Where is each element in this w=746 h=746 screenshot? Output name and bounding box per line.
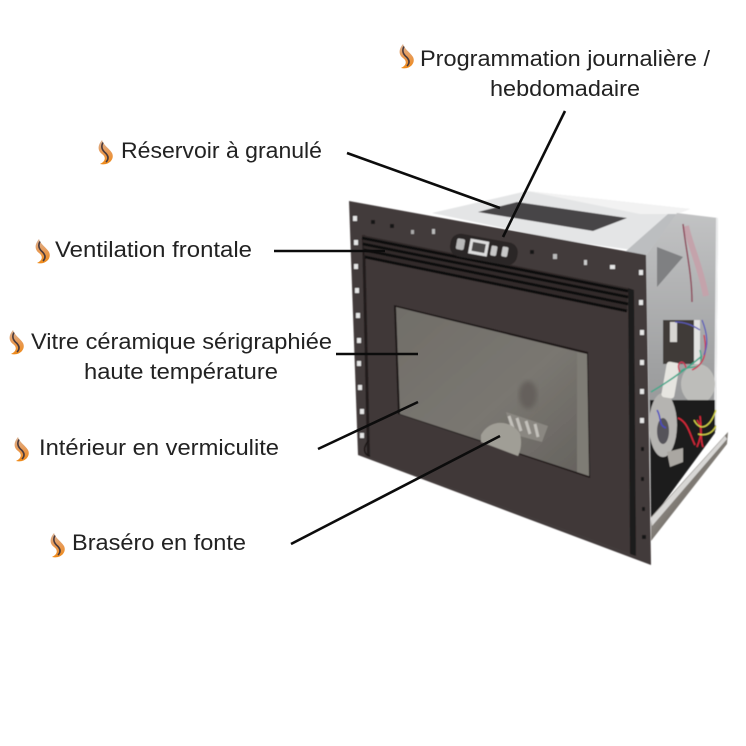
glass window xyxy=(394,305,590,478)
control panel xyxy=(448,232,519,267)
label: Programmation: Programmation journalière / xyxy=(420,46,711,71)
frame holes xyxy=(353,216,644,438)
left dark strip xyxy=(362,235,370,457)
label: Programmation xyxy=(400,44,711,101)
black chamber xyxy=(650,400,715,520)
burn pot reflection xyxy=(481,381,548,456)
white fan xyxy=(649,393,677,457)
top dark panel xyxy=(478,202,627,231)
power cord xyxy=(365,440,370,456)
interior reflection xyxy=(577,352,589,476)
door panel xyxy=(365,257,630,553)
label: Réservoir: Réservoir à granulé xyxy=(121,138,322,163)
relay block xyxy=(663,320,695,364)
label: Ventilation: Ventilation frontale xyxy=(55,237,252,262)
side of casing with electronics xyxy=(646,213,718,520)
ribbon cable xyxy=(686,226,706,296)
label: Intérieur: Intérieur en vermiculite xyxy=(39,435,279,460)
right dark strip xyxy=(628,288,636,556)
label: Vitre: Vitre céramique sérigraphiée xyxy=(31,329,332,354)
fireplace insert photo xyxy=(349,191,728,565)
label: Programmation: hebdomadaire xyxy=(490,76,640,101)
top of casing xyxy=(432,191,690,255)
ventilation grille xyxy=(362,235,628,311)
label: Vitre xyxy=(10,329,332,384)
sliding rail xyxy=(651,432,728,541)
wires xyxy=(651,350,702,392)
front frame xyxy=(349,201,651,565)
gauge fan xyxy=(681,364,715,404)
leader lines xyxy=(274,111,565,544)
label: Braséro: Braséro en fonte xyxy=(72,530,246,555)
label: Vitre: haute température xyxy=(84,359,278,384)
